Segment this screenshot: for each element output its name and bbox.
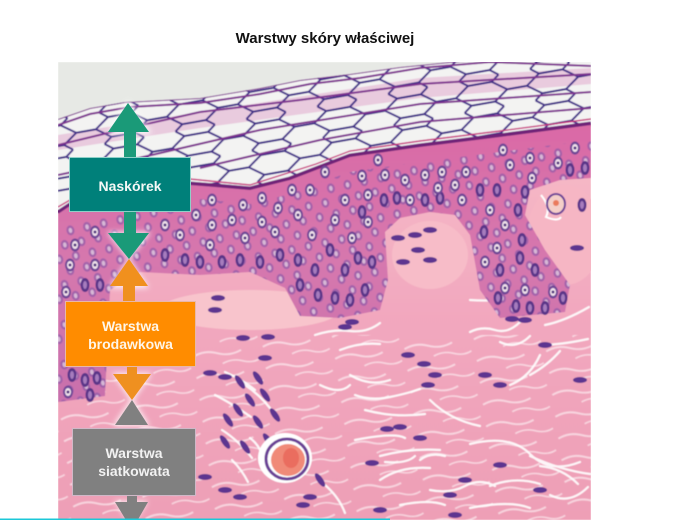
epidermal cell nuclei (61, 142, 590, 402)
histology photo of skin layers (58, 62, 591, 520)
collagen fibres (215, 296, 590, 513)
arrow: epidermis down (108, 211, 149, 259)
dermal nuclei (198, 227, 587, 518)
label box: Warstwa siatkowata: Warstwa (105, 445, 163, 461)
arrow: papillary layer down (113, 366, 151, 400)
blood vessel lower left (258, 433, 312, 483)
epidermal cell pattern (58, 125, 591, 410)
capillary in right papilla (541, 194, 586, 251)
stratum granulosum dark band (58, 124, 591, 213)
label box: Warstwa brodawkowa (66, 302, 196, 366)
arrow: papillary layer up (110, 259, 148, 302)
label box: Warstwa siatkowata (72, 428, 196, 496)
arrow: reticular layer up (115, 400, 148, 425)
label box: Naskórek (70, 158, 190, 212)
label box: Warstwa brodawkowa: brodawkowa (88, 336, 173, 352)
arrow halos (107, 100, 152, 520)
background above the skin (58, 62, 445, 118)
dermis tissue (58, 170, 603, 520)
label box: Naskórek: Naskórek (98, 178, 162, 194)
stratum corneum with cell network (58, 62, 591, 210)
epidermis tissue (58, 125, 591, 402)
label box: Warstwa brodawkowa: Warstwa (102, 318, 159, 334)
label box: Warstwa siatkowata: siatkowata (98, 463, 170, 479)
arrow: reticular layer down (115, 495, 148, 520)
title: Warstwy skóry właściwej (236, 30, 414, 47)
arrow: epidermis up (108, 103, 149, 158)
